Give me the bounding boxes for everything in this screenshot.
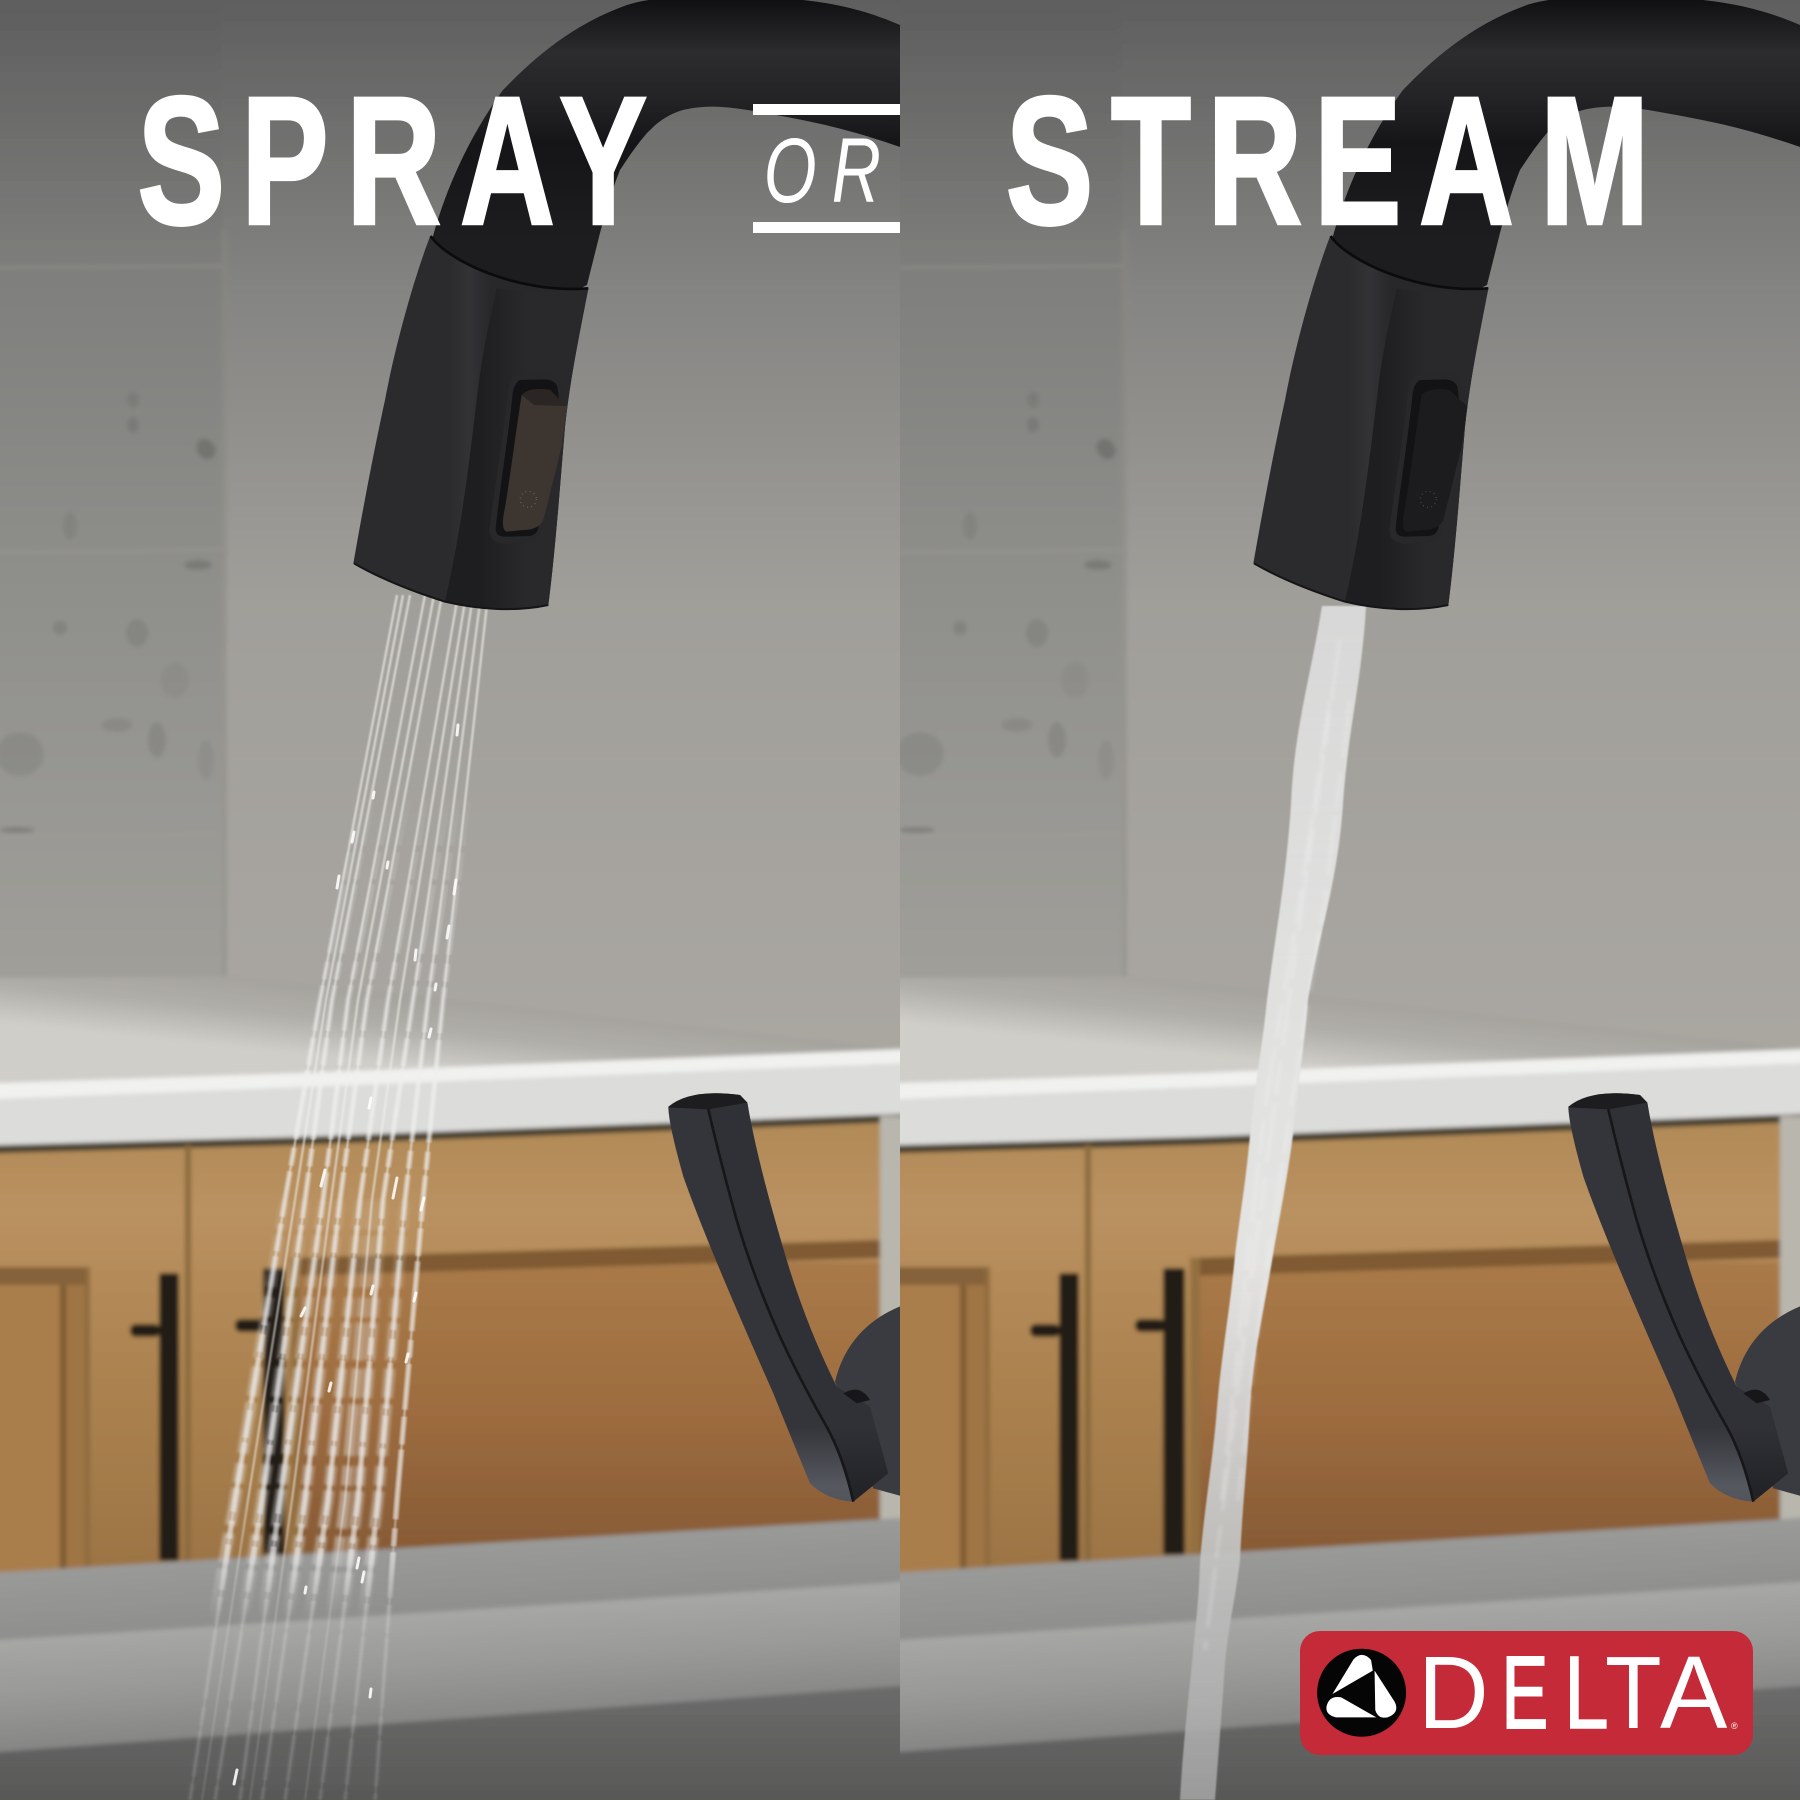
spout and spray head bbox=[353, 0, 900, 609]
logo wordmark bbox=[1418, 1634, 1727, 1751]
stream water column bbox=[1180, 606, 1366, 1800]
logo wordmark: A bbox=[1660, 1635, 1727, 1750]
logo wordmark: T bbox=[1605, 1634, 1662, 1750]
panel: spray photo bbox=[0, 0, 930, 1800]
heading: OR with rules bbox=[753, 104, 900, 233]
kitchen background bbox=[0, 0, 930, 1800]
logo wordmark: E bbox=[1502, 1634, 1548, 1750]
spray button, stream position bbox=[1403, 389, 1467, 532]
spray button, spray position bbox=[503, 389, 567, 532]
faucet lever handle bbox=[668, 1093, 903, 1502]
heading: SPRAY: SPRAY bbox=[138, 58, 647, 263]
panel: stream photo bbox=[870, 0, 1800, 1800]
logo: Delta bbox=[1300, 1631, 1753, 1755]
faucet lever handle bbox=[1568, 1093, 1800, 1502]
registered mark: ® bbox=[1731, 1721, 1738, 1731]
logo wordmark: L bbox=[1564, 1634, 1609, 1750]
spray water streams bbox=[190, 595, 488, 1800]
heading: STREAM: STREAM bbox=[1006, 58, 1649, 263]
logo wordmark: D bbox=[1418, 1636, 1489, 1751]
heading: OR with rules: OR bbox=[764, 120, 881, 222]
icon: Delta triangle emblem bbox=[1317, 1649, 1406, 1737]
kitchen background bbox=[870, 0, 1800, 1800]
spout and spray head bbox=[1253, 0, 1800, 609]
logo background bbox=[1300, 1631, 1753, 1755]
